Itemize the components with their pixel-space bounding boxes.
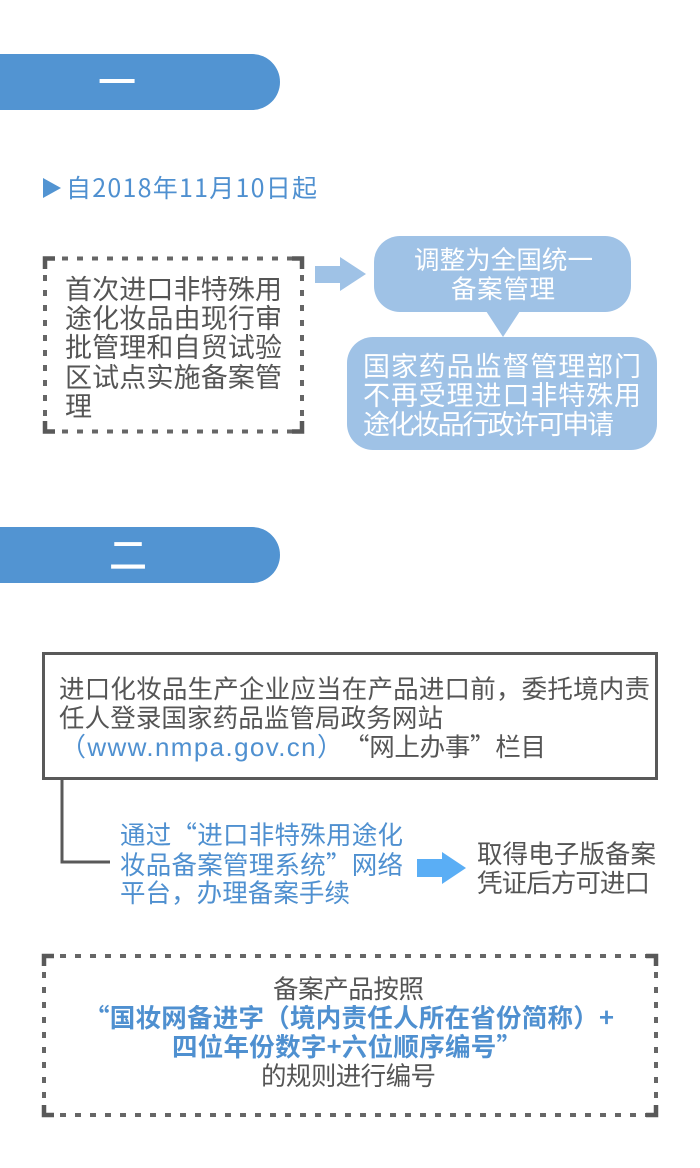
bubble: no longer accepting applications: [347, 337, 657, 450]
text: obtain certificate: 凭证后方可进口: [477, 863, 650, 900]
banner heading one: 一: [98, 52, 136, 107]
bubble: no longer accepting applications: 不再受理进口非特殊用: [363, 374, 641, 413]
panel: solid box entrust login: 进口化妆品生产企业应当在产品进口前，委托境内责: [59, 669, 650, 706]
arrow to adjustment bubble: [315, 257, 366, 291]
bubble: adjustment: 调整为全国统一: [414, 240, 593, 277]
bubble: no longer accepting applications: 途化妆品行政许可申请: [363, 403, 614, 442]
panel: dashed box first import: 区试点实施备案管: [65, 356, 282, 395]
date heading: 自2018年11月10日起: [66, 169, 317, 205]
bubble: no longer accepting applications: 国家药品监督管理部门: [363, 345, 641, 384]
bubble: adjustment: [374, 236, 631, 337]
text: obtain certificate: 取得电子版备案: [477, 834, 656, 871]
section banner two: [0, 525, 280, 583]
panel: solid box entrust login: [44, 654, 656, 778]
section banner one: [0, 52, 280, 110]
panel: dashed box numbering rule: 的规则进行编号: [261, 1056, 436, 1093]
panel: solid box entrust login: 任人登录国家药品监管局政务网站: [59, 698, 443, 735]
panel: dashed box numbering rule: 四位年份数字+六位顺序编号”: [172, 1027, 522, 1064]
panel: dashed box first import: 理: [65, 385, 92, 424]
panel: solid box entrust login: “网上办事”栏目: [344, 727, 546, 764]
bubble: adjustment: 备案管理: [451, 269, 555, 306]
arrow to certificate: [417, 852, 466, 884]
text: system platform: 通过“进口非特殊用途化: [120, 815, 403, 852]
panel: solid box entrust login: （www.nmpa.gov.cn）: [60, 732, 343, 762]
text: system platform: [120, 815, 403, 910]
panel: dashed box first import: 批管理和自贸试验: [65, 326, 282, 365]
panel: dashed box numbering rule: “国妆网备进字（境内责任人所在省份简称）+: [84, 998, 614, 1035]
panel: dashed box first import: [45, 258, 302, 432]
banner heading two: 二: [109, 525, 147, 580]
text: system platform: 平台，办理备案手续: [120, 873, 350, 910]
panel: dashed box first import: 途化妆品由现行审: [65, 297, 282, 336]
panel: dashed box numbering rule: [44, 956, 656, 1115]
panel: dashed box first import: 首次进口非特殊用: [65, 268, 282, 307]
text: obtain certificate: [477, 834, 656, 900]
panel: dashed box numbering rule: 备案产品按照: [273, 969, 424, 1006]
connector line: [62, 780, 110, 862]
text: system platform: 妆品备案管理系统”网络: [120, 845, 403, 882]
